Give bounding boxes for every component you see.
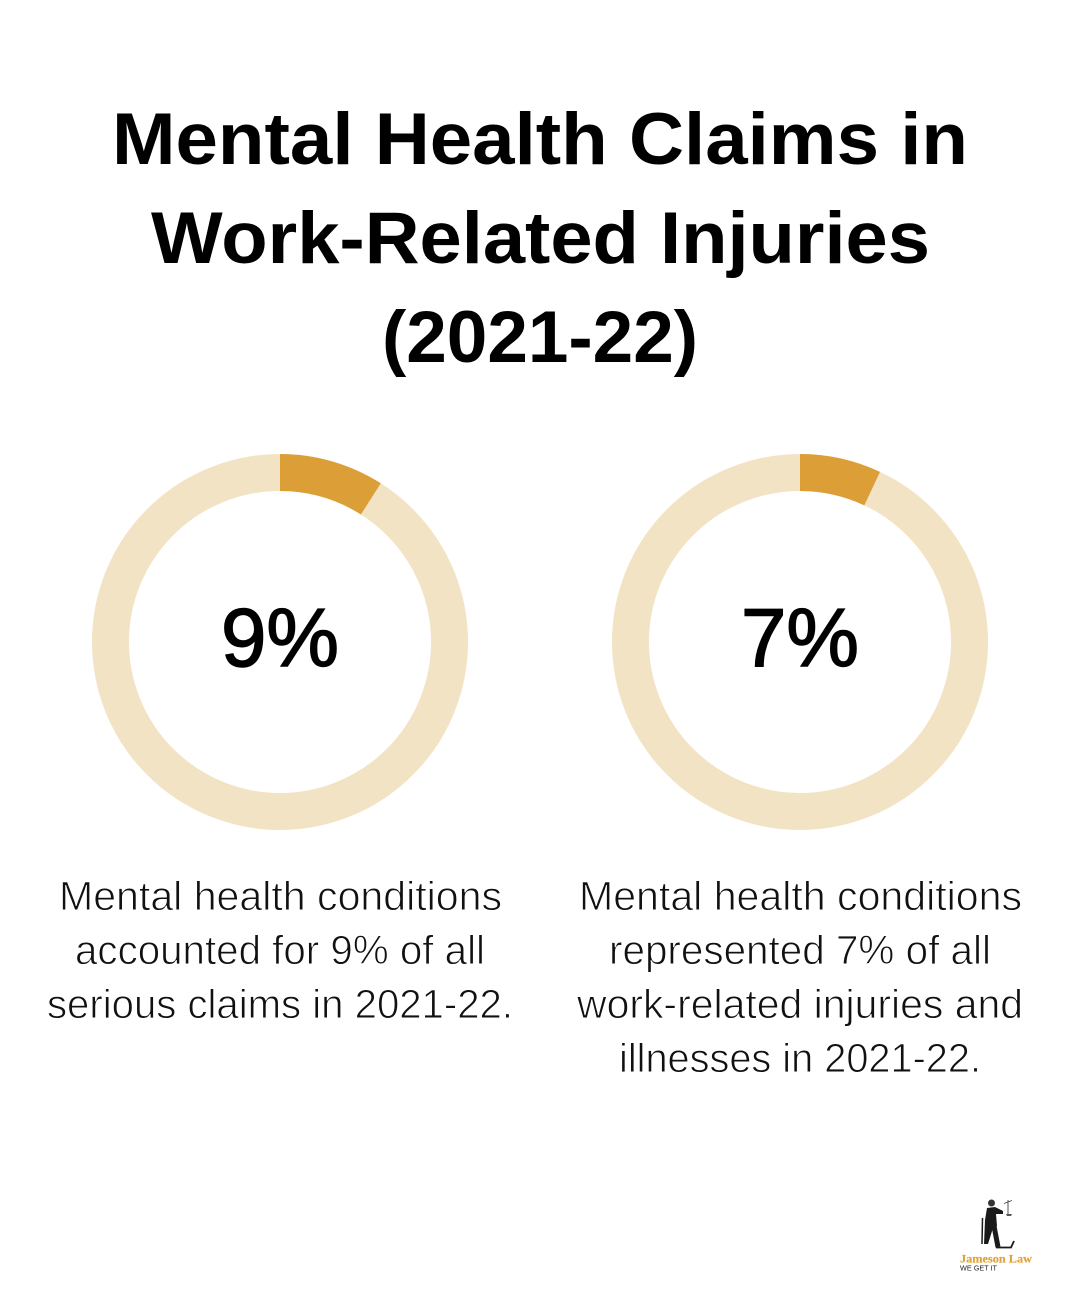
stat: 7%: 7% <box>741 591 859 684</box>
description: 7% of work-related injuries <box>576 873 1023 1081</box>
description: 9% of serious claims <box>47 873 513 1027</box>
panel: 9% serious claims <box>47 454 513 1027</box>
title: (2021-22) <box>382 297 698 378</box>
panel: 7% work-related injuries <box>576 454 1023 1081</box>
tagline: WE GET IT <box>960 1266 998 1272</box>
donut chart: 7% <box>630 454 970 812</box>
description: 9% of serious claims: serious claims in 2021-22. <box>47 981 513 1027</box>
wordmark: Jameson Law <box>960 1254 1033 1266</box>
description: 9% of serious claims: Mental health conditions <box>59 873 502 919</box>
stat: 9%: 9% <box>221 591 339 684</box>
title <box>112 99 968 378</box>
description: 7% of work-related injuries: Mental health conditions <box>579 873 1022 919</box>
description: 7% of work-related injuries: work-related injuries and <box>576 981 1023 1027</box>
logo: Jameson Law <box>960 1200 1033 1272</box>
description: 7% of work-related injuries: represented 7% of all <box>609 927 991 973</box>
title: Mental Health Claims in <box>112 99 968 180</box>
title: Work-Related Injuries <box>151 198 930 279</box>
icon: lady justice <box>982 1200 1014 1248</box>
donut chart: 9% <box>110 454 450 812</box>
description: 7% of work-related injuries: illnesses in 2021-22. <box>619 1035 981 1081</box>
description: 9% of serious claims: accounted for 9% of all <box>75 927 485 973</box>
